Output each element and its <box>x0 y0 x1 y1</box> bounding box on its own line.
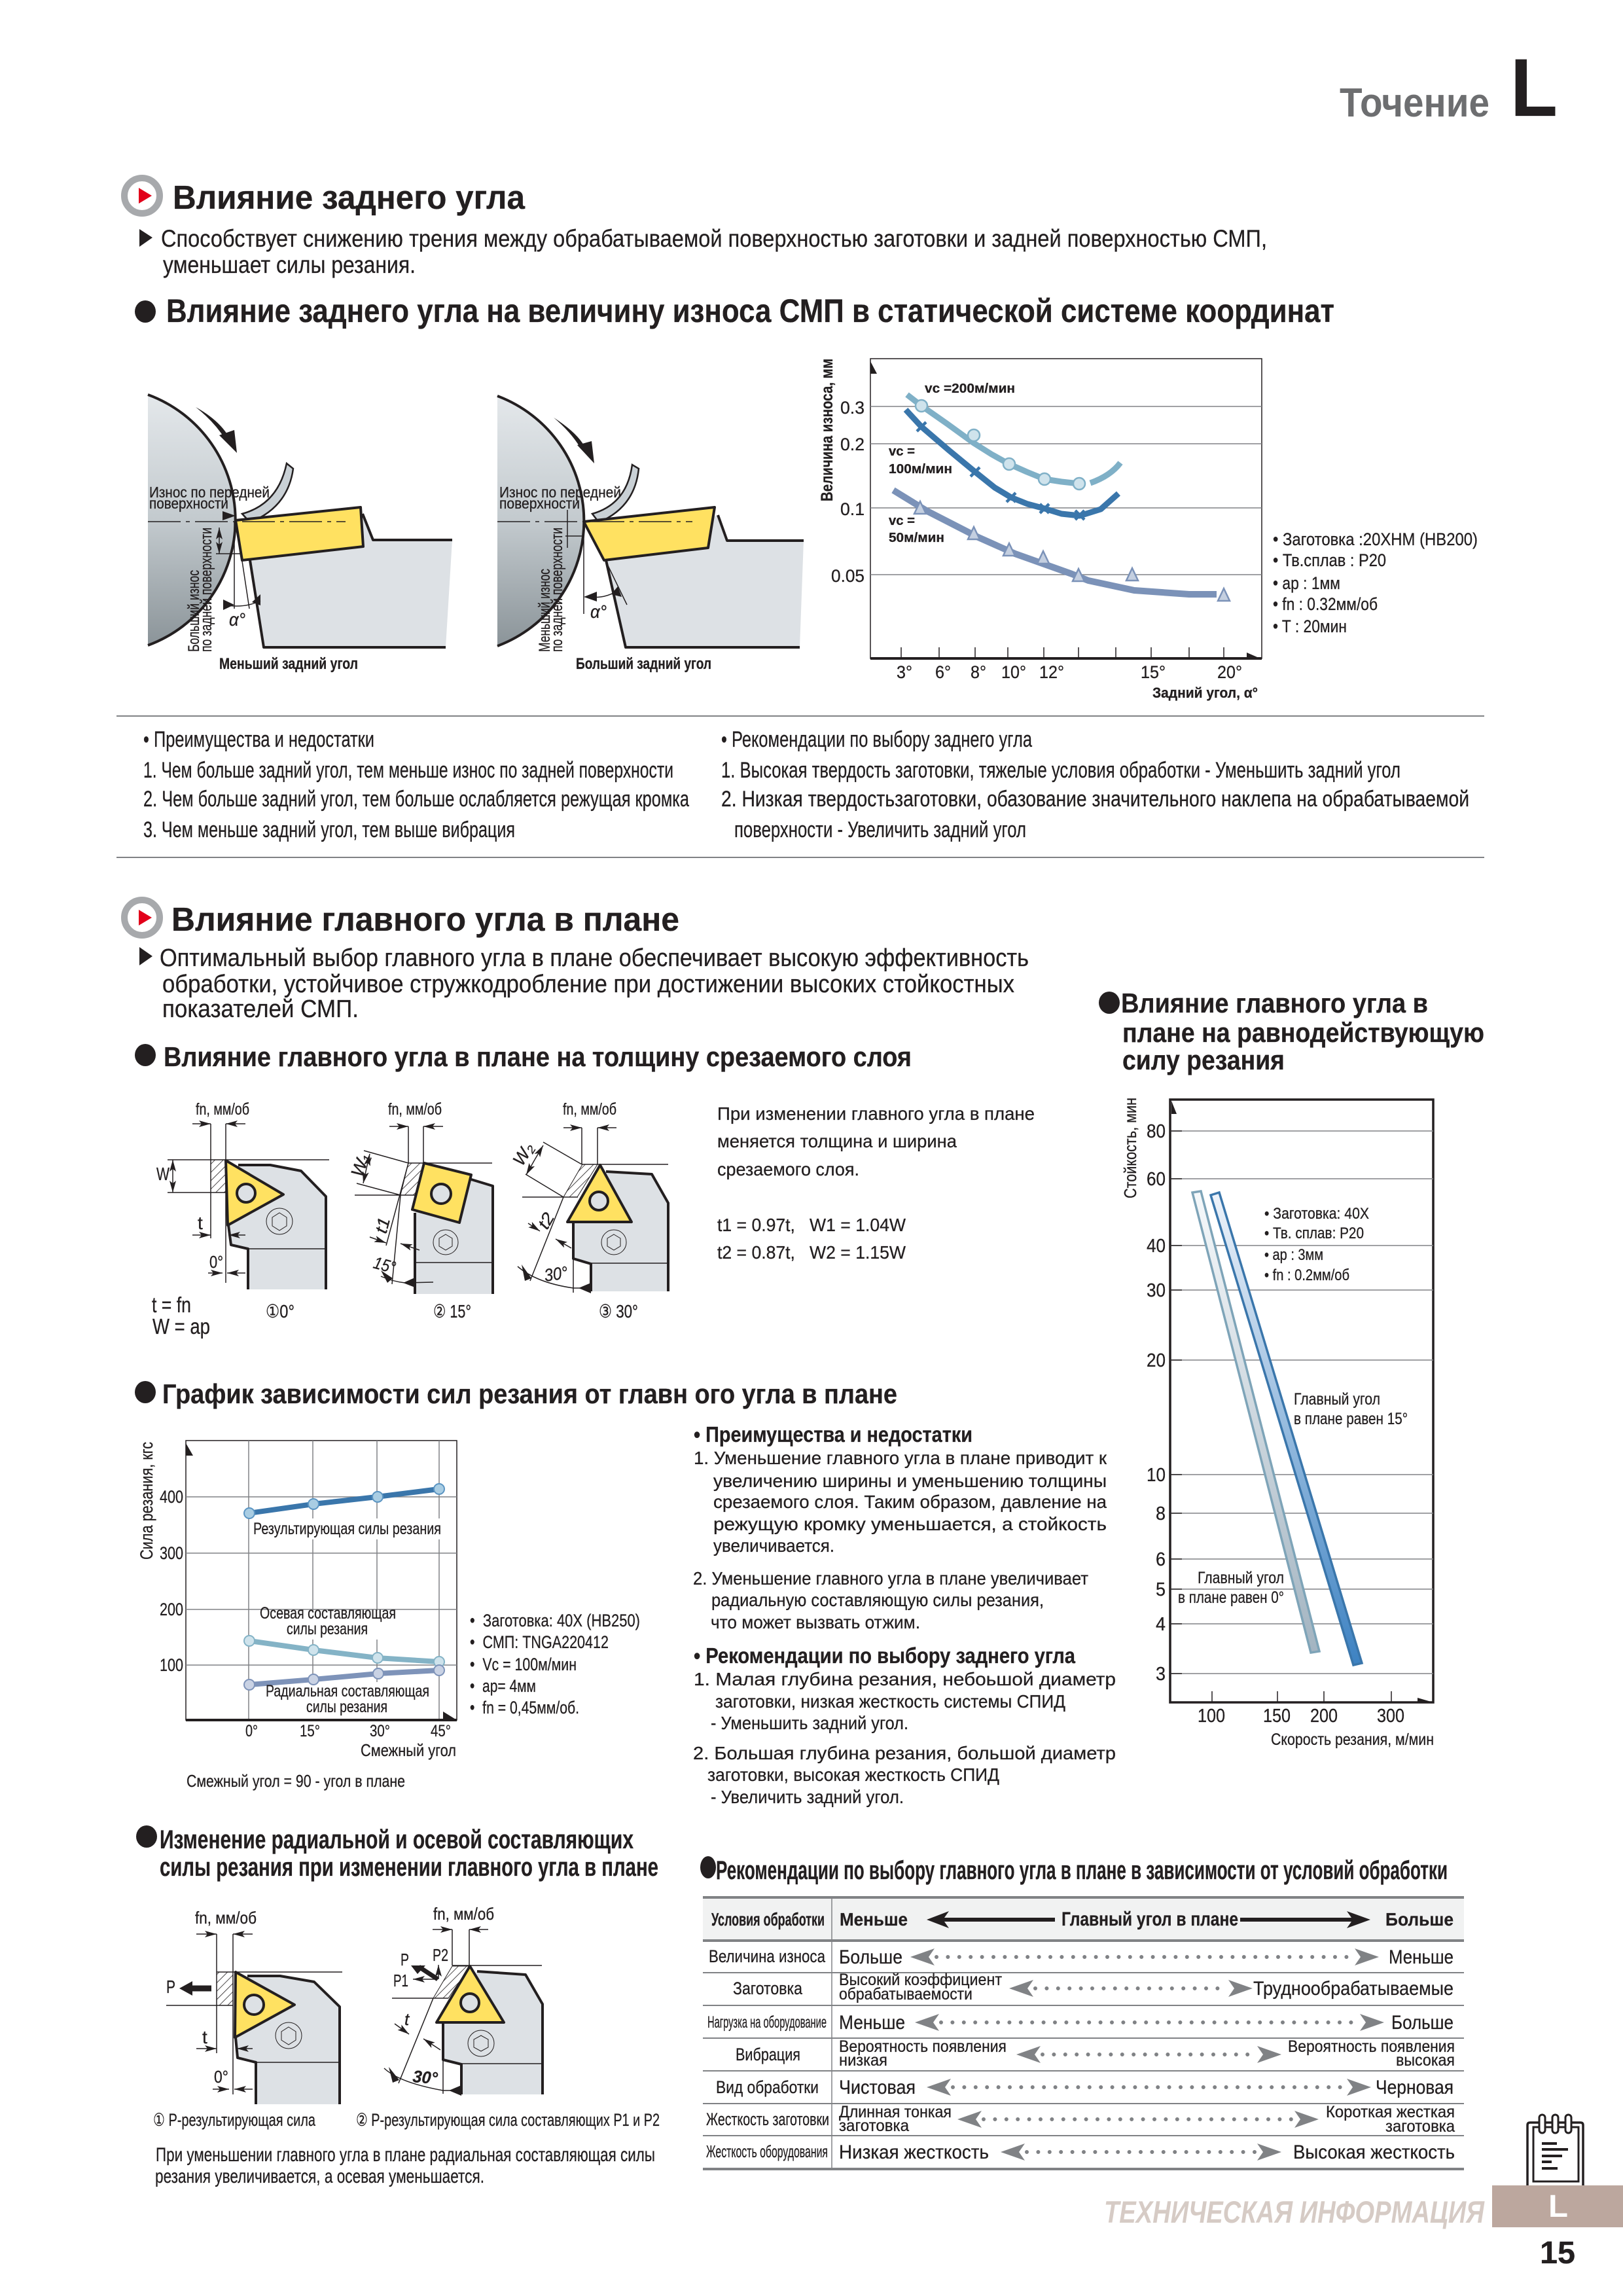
caption: force diagrams: ② Р-результирующая сила составляющих Р1 и Р2 <box>356 2110 660 2130</box>
chart: tool life vs cutting speed: 30 <box>1147 1280 1166 1301</box>
diagram: force components at 30 degrees: P2 <box>433 1945 448 1965</box>
chart: tool life vs cutting speed: 20 <box>1147 1350 1166 1371</box>
band: lead angle 15 degrees <box>1211 1193 1362 1665</box>
text: thickness explanation: При изменении главного угла в плане <box>717 1103 1035 1124</box>
chart: cutting force vs angle: 300 <box>160 1543 183 1563</box>
chart: wear vs rear angle: 20° <box>1217 662 1242 682</box>
diagram: larger rear angle: Меньший износ <box>536 569 554 652</box>
chart conditions: force chart: • fn = 0,45мм/об. <box>470 1698 579 1717</box>
chart: wear vs rear angle: Задний угол, α° <box>1152 685 1258 701</box>
diagram: insert at 30 degrees: W₂ <box>509 1139 538 1169</box>
chart: wear vs rear angle: vc = <box>889 514 915 528</box>
row: machining type: Чистовая <box>839 2077 916 2098</box>
intro text: rear angle: Способствует снижению трения между обрабатываемой поверхностью заготовки и задней поверхностью СМП, <box>161 225 1267 252</box>
header: chapter title: L <box>1510 43 1558 134</box>
chart: wear vs rear angle: vc = <box>889 444 915 459</box>
chart: tool life vs cutting speed: в плане равен 15° <box>1294 1410 1408 1428</box>
diagram: insert at 15 degrees: W₁ <box>347 1151 374 1179</box>
line: axial force <box>244 1636 444 1667</box>
text: pros and cons of lead angle: 2. Уменьшение главного угла в плане увеличивает <box>693 1568 1088 1588</box>
row: machining type: Вид обработки <box>716 2077 819 2097</box>
row: machine load: Нагрузка на оборудование <box>707 2013 827 2032</box>
list: recommendations <box>721 727 1469 842</box>
chart: cutting force vs angle: 0° <box>245 1722 258 1740</box>
table header: Главный угол в плане <box>1061 1909 1238 1930</box>
diagram: insert at 0 degrees: W = ap <box>152 1314 210 1338</box>
chart: cutting force vs angle: 30° <box>370 1722 390 1740</box>
diagram: larger rear angle: по задней поверхности <box>548 528 566 652</box>
chart: cutting force vs angle: Осевая составляющая <box>260 1604 396 1623</box>
subheading: wear influence: Влияние заднего угла на величину износа СМП в статической системе координат <box>166 293 1334 329</box>
diagram: smaller rear angle: по задней поверхности <box>198 528 215 652</box>
intro text: lead angle: показателей СМП. <box>162 996 359 1023</box>
chart: tool life vs cutting speed: Стойкость, мин <box>1120 1098 1140 1198</box>
row: wear: Больше <box>839 1946 902 1968</box>
curve: vc 200 <box>907 395 1120 490</box>
chart: wear vs rear angle: 8° <box>971 662 986 682</box>
chart: tool life vs cutting speed: 40 <box>1147 1236 1166 1257</box>
diagram: force components at 30 degrees <box>384 1904 543 2096</box>
text: thickness explanation: t1 = 0.97t, W1 = 1.04W <box>717 1215 906 1235</box>
chart conditions: force chart <box>470 1611 640 1717</box>
chart: wear vs rear angle: 0.1 <box>840 499 865 519</box>
diagram: smaller rear angle: Износ по передней <box>149 484 270 501</box>
diagram: insert at 30 degrees: fn, мм/об <box>563 1100 616 1119</box>
row: machine rigidity <box>706 2142 1455 2163</box>
chart conditions: force chart: • СМП: TNGA220412 <box>470 1632 609 1652</box>
text: pros and cons of lead angle: режущую кромку уменьшается, а стойкость <box>713 1514 1107 1534</box>
chart: wear vs rear angle: 100м/мин <box>889 462 952 476</box>
row: workpiece rigidity <box>706 2103 1455 2136</box>
chart conditions: wear chart: • Тв.сплав : P20 <box>1273 550 1386 570</box>
table header: Больше <box>1385 1909 1454 1929</box>
row: workpiece: Высокий коэффициент <box>839 1971 1003 1989</box>
chart: tool life vs cutting speed: 200 <box>1310 1706 1338 1727</box>
chart: cutting force vs angle: Сила резания, кгс <box>137 1442 156 1560</box>
subheading: radial and axial components <box>136 1825 658 1882</box>
diagram: force components at 30 degrees: P1 <box>393 1971 408 1990</box>
row: vibration: низкая <box>839 2051 887 2070</box>
chart: cutting force vs angle: 400 <box>160 1487 183 1507</box>
subheading: radial and axial components: силы резания при изменении главного угла в плане <box>160 1853 658 1882</box>
text: pros and cons of lead angle: срезаемого слоя. Таким образом, давление на <box>713 1492 1107 1512</box>
chart: wear vs rear angle: 6° <box>935 662 951 682</box>
footer: technical information label: ТЕХНИЧЕСКАЯ ИНФОРМАЦИЯ <box>1104 2195 1485 2229</box>
section heading: rear angle: Влияние заднего угла <box>173 179 526 216</box>
chart: tool life vs cutting speed: 80 <box>1147 1121 1166 1142</box>
diagram: larger rear angle: α° <box>590 601 607 622</box>
intro text: rear angle <box>139 225 1267 278</box>
diagram: insert at 30 degrees: t2 <box>533 1209 558 1232</box>
chart: tool life vs cutting speed: • ap : 3мм <box>1264 1246 1323 1264</box>
chart: tool life vs cutting speed: 150 <box>1263 1706 1291 1727</box>
diagram: resultant force at 0 degrees: 0° <box>214 2067 228 2087</box>
chart conditions: force chart: • Vc = 100м/мин <box>470 1655 577 1674</box>
row: wear <box>709 1946 1454 1968</box>
chart: cutting force vs angle: Смежный угол = 90 - угол в плане <box>187 1771 405 1791</box>
diagram: insert at 15 degrees: fn, мм/об <box>388 1100 442 1119</box>
chart: tool life vs cutting speed: 3 <box>1156 1664 1166 1685</box>
row: workpiece rigidity: Короткая жесткая <box>1326 2103 1455 2121</box>
diagram: insert at 0 degrees <box>152 1100 329 1338</box>
chart: cutting force vs angle: силы резания <box>287 1620 368 1638</box>
diagram: insert at 15 degrees: 15° <box>371 1253 398 1278</box>
subheading: radial and axial components: Изменение радиальной и осевой составляющих <box>160 1825 633 1854</box>
row: machine rigidity: Низкая жесткость <box>839 2142 989 2163</box>
list: pros and cons: 2. Чем больше задний угол, тем больше ослабляется режущая кромка <box>143 787 689 812</box>
diagram: smaller rear angle <box>148 395 452 673</box>
list: pros and cons: 3. Чем меньше задний угол, тем выше вибрация <box>143 817 515 842</box>
diagram: smaller rear angle: α° <box>229 609 245 630</box>
diagram: insert at 0 degrees: 0° <box>209 1252 223 1272</box>
chart: wear vs rear angle: vc =200м/мин <box>925 382 1015 396</box>
row: workpiece rigidity: Жесткость заготовки <box>706 2109 829 2129</box>
diagram: larger rear angle: Больший задний угол <box>576 655 711 673</box>
row: workpiece: обрабатываемости <box>839 1985 972 2003</box>
intro text: lead angle: Оптимальный выбор главного угла в плане обеспечивает высокую эффективность <box>160 944 1029 972</box>
row: machine load: Больше <box>1391 2012 1454 2034</box>
chart: cutting force vs angle: 100 <box>160 1655 183 1675</box>
row: vibration: Вероятность появления <box>839 2037 1007 2056</box>
row: vibration: Вероятность появления <box>1288 2037 1455 2056</box>
header: chapter title: Точение <box>1340 81 1489 126</box>
band: lead angle 0 degrees <box>1192 1191 1319 1653</box>
list: pros and cons: • Преимущества и недостатки <box>143 727 374 752</box>
chart: tool life vs cutting speed: Главный угол <box>1198 1569 1284 1587</box>
text: thickness explanation: меняется толщина и ширина <box>717 1131 957 1151</box>
diagram: insert at 30 degrees <box>509 1100 668 1321</box>
caption: force diagrams: резания увеличивается, а осевая уменьшается. <box>155 2166 484 2187</box>
chart: tool life vs cutting speed: 5 <box>1156 1579 1166 1600</box>
chart: tool life vs cutting speed <box>1120 1098 1434 1749</box>
chart: tool life vs cutting speed: в плане равен 0° <box>1178 1588 1284 1607</box>
text: recommendations for rear angle <box>693 1643 1116 1807</box>
intro text: rear angle: уменьшает силы резания. <box>163 251 416 278</box>
list: pros and cons <box>143 727 689 842</box>
chart: cutting force vs angle: 200 <box>160 1600 183 1619</box>
caption: force diagrams: При уменьшении главного угла в плане радиальная составляющая силы <box>156 2144 655 2166</box>
diagram: smaller rear angle: Больший износ <box>185 570 203 652</box>
row: workpiece rigidity: заготовка <box>839 2117 909 2135</box>
row: vibration <box>736 2037 1455 2070</box>
row: machine rigidity: Жесткость оборудования <box>706 2142 828 2161</box>
chart: tool life vs cutting speed: • Заготовка: 40Х <box>1264 1205 1369 1223</box>
chart conditions: wear chart: • ap : 1мм <box>1273 573 1340 593</box>
curve: vc 50 <box>893 490 1230 601</box>
chart conditions: wear chart: • Заготовка :20ХНМ (HB200) <box>1273 529 1478 549</box>
chart: cutting force vs angle: 15° <box>300 1722 320 1740</box>
subheading: chip thickness: Влияние главного угла в плане на толщину срезаемого слоя <box>164 1041 912 1072</box>
diagram: insert at 15 degrees <box>347 1100 493 1321</box>
text: pros and cons of lead angle: увеличивается. <box>713 1535 834 1556</box>
chart: wear vs rear angle: 0.2 <box>840 435 865 454</box>
diagram: larger rear angle: Износ по передней <box>499 484 621 501</box>
row: wear: Меньше <box>1389 1946 1454 1968</box>
chart: wear vs rear angle: 15° <box>1141 662 1166 682</box>
diagram: force components at 30 degrees: P <box>401 1950 409 1969</box>
chart: tool life vs cutting speed: 60 <box>1147 1169 1166 1190</box>
diagram: resultant force at 0 degrees: t <box>202 2027 207 2047</box>
text: thickness explanation: срезаемого слоя. <box>717 1159 859 1179</box>
chart: cutting force vs angle: Радиальная составляющая <box>266 1682 429 1700</box>
row: workpiece rigidity: Длинная тонкая <box>839 2103 952 2121</box>
diagram: insert at 0 degrees: t = fn <box>152 1293 191 1317</box>
list: recommendations: 1. Высокая твердость заготовки, тяжелые условия обработки - Уменьшить задний угол <box>721 758 1400 783</box>
text: recommendations for rear angle: • Рекомендации по выбору заднего угла <box>694 1643 1076 1668</box>
chart: wear vs rear angle: 0.3 <box>840 398 865 418</box>
diagram: insert at 30 degrees: ③ 30° <box>599 1301 638 1321</box>
curve: vc 100 <box>906 410 1118 520</box>
caption: force diagrams: ① Р-результирующая сила <box>153 2110 316 2130</box>
chart: tool life vs cutting speed: 8 <box>1156 1503 1166 1524</box>
subheading: resultant force: плане на равнодействующую <box>1122 1017 1484 1048</box>
row: vibration: Вибрация <box>736 2045 800 2064</box>
caption: force diagrams <box>153 2110 660 2187</box>
chart: tool life vs cutting speed: 4 <box>1156 1614 1166 1635</box>
text: pros and cons of lead angle: 1. Уменьшение главного угла в плане приводит к <box>694 1448 1107 1468</box>
text: pros and cons of lead angle: что может вызвать отжим. <box>711 1612 920 1632</box>
row: workpiece <box>733 1971 1454 2003</box>
diagram: resultant force at 0 degrees <box>166 1908 342 2104</box>
text: recommendations for rear angle: 2. Большая глубина резания, большой диаметр <box>693 1743 1116 1763</box>
text: pros and cons of lead angle <box>693 1422 1107 1632</box>
chart: tool life vs cutting speed: Скорость резания, м/мин <box>1271 1731 1434 1749</box>
diagram: insert at 0 degrees: ①0° <box>266 1301 294 1321</box>
chart: tool life vs cutting speed: • fn : 0.2мм/об <box>1264 1266 1349 1284</box>
diagram: resultant force at 0 degrees: P <box>166 1977 175 1997</box>
row: machine load <box>707 2012 1454 2034</box>
footer: section tab L <box>1492 2185 1623 2227</box>
diagram: force components at 30 degrees: 30° <box>412 2066 439 2088</box>
text: pros and cons of lead angle: радиальную составляющую силы резания, <box>711 1590 1044 1610</box>
diagram: larger rear angle: поверхности <box>499 495 580 512</box>
list: recommendations: поверхности - Увеличить задний угол <box>734 817 1026 842</box>
table header: Условия обработки <box>711 1909 825 1929</box>
footer: section tab L: L <box>1548 2189 1568 2224</box>
text: recommendations for rear angle: 1. Малая глубина резания, небоьшой диаметр <box>694 1669 1116 1689</box>
intro text: lead angle: обработки, устойчивое стружкодробление при достижении высоких стойкостных <box>162 971 1014 998</box>
chart: wear vs rear angle: Величина износа, мм <box>818 359 836 501</box>
chart conditions: wear chart: • fn : 0.32мм/об <box>1273 594 1378 614</box>
text: recommendations for rear angle: заготовки, низкая жесткость системы СПИД <box>715 1691 1065 1712</box>
text: recommendations for rear angle: - Увеличить задний угол. <box>711 1787 904 1807</box>
row: workpiece: Заготовка <box>733 1979 803 1998</box>
row: machine rigidity: Высокая жесткость <box>1293 2142 1455 2163</box>
chart: cutting force vs angle: Смежный угол <box>361 1740 456 1760</box>
row: wear: Величина износа <box>709 1946 826 1966</box>
chart: wear vs rear angle: 12° <box>1039 662 1064 682</box>
chart conditions: wear chart: • T : 20мин <box>1273 617 1347 636</box>
chart: tool life vs cutting speed: 300 <box>1377 1706 1404 1727</box>
diagram: larger rear angle <box>497 396 804 673</box>
row: machine load: Меньше <box>839 2012 905 2034</box>
row: workpiece rigidity: заготовка <box>1385 2117 1455 2136</box>
list: pros and cons: 1. Чем больше задний угол, тем меньше износ по задней поверхности <box>143 758 673 783</box>
diagram: insert at 15 degrees: t1 <box>371 1215 394 1236</box>
chart: tool life vs cutting speed: 10 <box>1147 1465 1166 1486</box>
table: lead angle recommendations <box>703 1897 1464 2169</box>
chart: wear vs rear angle: 3° <box>897 662 912 682</box>
row: machining type: Черновая <box>1376 2077 1454 2098</box>
diagram: insert at 0 degrees: fn, мм/об <box>196 1100 249 1119</box>
intro text: lead angle <box>139 944 1029 1023</box>
chart: tool life vs cutting speed: 6 <box>1156 1549 1166 1570</box>
chart: tool life vs cutting speed: 100 <box>1198 1706 1225 1727</box>
diagram: smaller rear angle: поверхности <box>149 495 228 512</box>
subheading: resultant force: Влияние главного угла в <box>1121 988 1428 1018</box>
chart: cutting force vs angle: 45° <box>431 1722 451 1740</box>
chart conditions: force chart: • ap= 4мм <box>470 1676 536 1696</box>
subheading: resultant force <box>1099 988 1484 1075</box>
diagram: insert at 0 degrees: t <box>198 1213 203 1233</box>
text: recommendations for rear angle: - Уменьшить задний угол. <box>711 1713 908 1733</box>
table header <box>711 1909 1454 1930</box>
text: thickness explanation: t2 = 0.87t, W2 = 1.15W <box>717 1242 906 1263</box>
chart: cutting force vs angle: силы резания <box>306 1698 387 1716</box>
chart: wear vs rear angle: 10° <box>1001 662 1026 682</box>
row: machining type <box>716 2077 1454 2098</box>
diagram: insert at 0 degrees: W <box>156 1164 169 1184</box>
table header: Меньше <box>840 1909 908 1929</box>
chart conditions: force chart: • Заготовка: 40Х (HB250) <box>470 1611 640 1630</box>
icon: notepad <box>1527 2115 1583 2185</box>
line: radial force <box>244 1665 444 1690</box>
diagram: resultant force at 0 degrees: fn, мм/об <box>195 1908 257 1928</box>
section heading: main lead angle: Влияние главного угла в плане <box>171 901 679 938</box>
page number: 15 <box>1540 2236 1575 2270</box>
subheading: resultant force: силу резания <box>1122 1045 1285 1075</box>
row: workpiece: Труднообрабатываемые <box>1253 1978 1454 2000</box>
text: pros and cons of lead angle: • Преимущества и недостатки <box>694 1422 972 1446</box>
chart: cutting force vs angle <box>137 1441 457 1791</box>
chart: wear vs rear angle: 0.05 <box>831 566 865 586</box>
chart: cutting force vs angle: Результирующая силы резания <box>253 1520 441 1538</box>
chart: wear vs rear angle: 50м/мин <box>889 531 944 545</box>
chart: tool life vs cutting speed: • Тв. сплав: P20 <box>1264 1225 1364 1242</box>
chart: wear vs rear angle <box>818 359 1262 701</box>
subheading: cutting forces chart: График зависимости сил резания от главн ого угла в плане <box>162 1378 897 1409</box>
chart conditions: wear chart <box>1273 529 1478 636</box>
diagram: force components at 30 degrees: fn, мм/об <box>433 1904 494 1924</box>
text: pros and cons of lead angle: увеличению ширины и уменьшению толщины <box>713 1471 1107 1491</box>
text: thickness explanation <box>717 1103 1035 1263</box>
diagram: insert at 30 degrees: 30° <box>543 1263 569 1285</box>
text: recommendations for rear angle: заготовки, высокая жесткость СПИД <box>707 1765 999 1785</box>
diagram: force components at 30 degrees: t <box>404 2009 410 2029</box>
chart: tool life vs cutting speed: Главный угол <box>1294 1390 1380 1408</box>
diagram: insert at 15 degrees: ② 15° <box>433 1301 471 1321</box>
header: chapter title <box>1340 43 1558 134</box>
row: vibration: высокая <box>1396 2051 1455 2070</box>
list: recommendations: 2. Низкая твердостьзаготовки, обазование значительного наклепа на обрабатываемой <box>721 787 1469 812</box>
diagram: smaller rear angle: Меньший задний угол <box>219 655 358 673</box>
list: recommendations: • Рекомендации по выбору заднего угла <box>721 727 1032 752</box>
line: resultant force <box>244 1484 444 1518</box>
